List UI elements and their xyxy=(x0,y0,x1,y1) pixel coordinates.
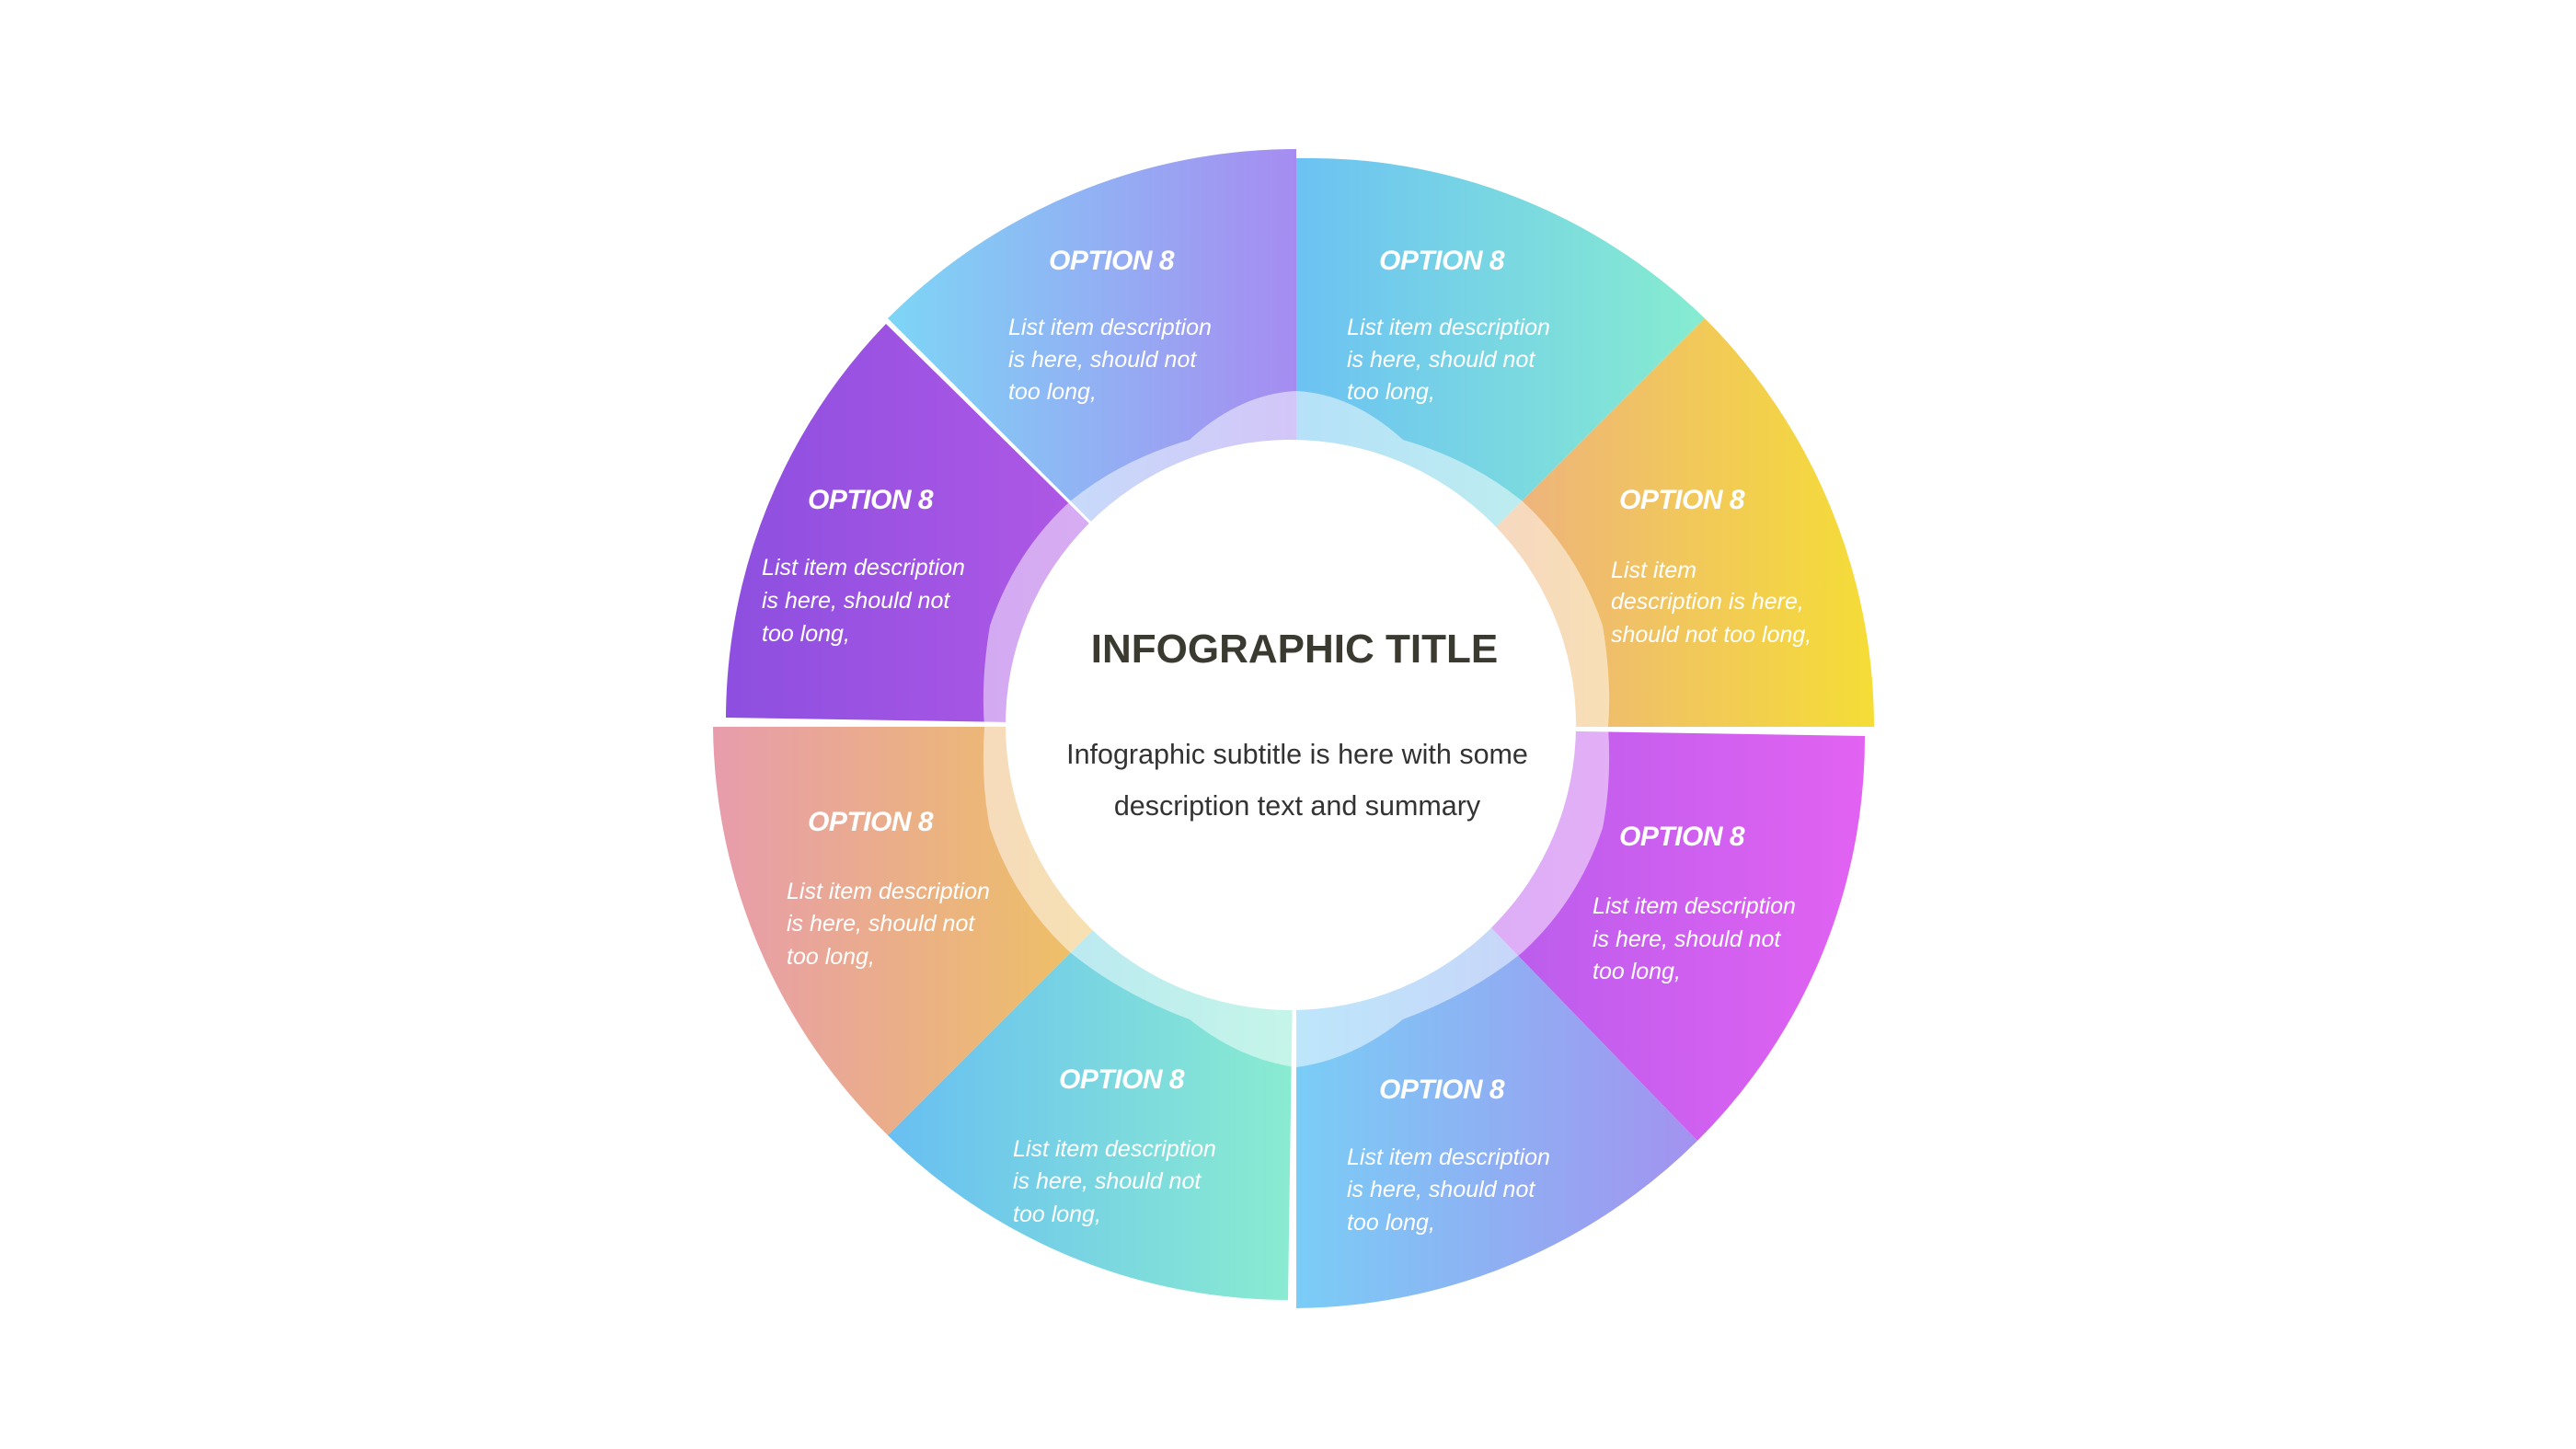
option: top-right: OPTION 8 xyxy=(1379,246,1505,276)
option: right-upper: List item xyxy=(1611,558,1696,583)
option: top-right: List item description xyxy=(1347,315,1550,340)
center title: INFOGRAPHIC TITLE xyxy=(1091,627,1498,672)
option: right-lower: List item description xyxy=(1593,893,1796,919)
option: bottom-left: is here, should not xyxy=(1013,1168,1202,1194)
option: left-upper: OPTION 8 xyxy=(808,485,934,515)
option: bottom-right xyxy=(1347,1075,1550,1236)
option: top-left xyxy=(1008,246,1212,405)
option: left-lower: too long, xyxy=(787,944,875,970)
option: right-upper: OPTION 8 xyxy=(1619,485,1745,515)
option: bottom-right: OPTION 8 xyxy=(1379,1075,1505,1105)
option: top-left: too long, xyxy=(1008,379,1097,405)
option: top-right: is here, should not xyxy=(1347,347,1535,373)
option: right-upper: description is here, xyxy=(1611,589,1804,615)
option: left-lower: is here, should not xyxy=(787,911,975,937)
wavy light ring xyxy=(983,391,1609,1067)
option: bottom-left xyxy=(1013,1064,1216,1227)
option: left-lower: OPTION 8 xyxy=(808,807,934,837)
option: right-lower: too long, xyxy=(1593,959,1681,984)
option: right-lower: is here, should not xyxy=(1593,926,1781,952)
option: left-lower: List item description xyxy=(787,879,990,904)
option: left-lower xyxy=(787,807,990,970)
option: bottom-left: List item description xyxy=(1013,1136,1216,1162)
option: right-lower: OPTION 8 xyxy=(1619,822,1745,852)
center white circle xyxy=(1006,440,1576,1010)
option: right-upper: should not too long, xyxy=(1611,622,1811,648)
option: top-right xyxy=(1347,246,1550,405)
center subtitle: Infographic subtitle is here with some xyxy=(1066,739,1528,770)
option: bottom-left: too long, xyxy=(1013,1202,1101,1227)
option: left-upper: List item description xyxy=(762,555,965,581)
option: right-lower xyxy=(1593,822,1796,984)
option: right-upper xyxy=(1611,485,1811,648)
option: top-left: List item description xyxy=(1008,315,1212,340)
option: bottom-left: OPTION 8 xyxy=(1059,1064,1185,1095)
option: left-upper: is here, should not xyxy=(762,588,950,614)
option: top-left: OPTION 8 xyxy=(1049,246,1175,276)
option: bottom-right: is here, should not xyxy=(1347,1177,1535,1202)
option: left-upper xyxy=(762,485,965,647)
center subtitle: description text and summary xyxy=(1114,790,1481,822)
option: top-left: is here, should not xyxy=(1008,347,1197,373)
option: bottom-right: List item description xyxy=(1347,1144,1550,1170)
wheel segments xyxy=(713,149,1874,1308)
option: bottom-right: too long, xyxy=(1347,1210,1435,1236)
option: left-upper: too long, xyxy=(762,621,850,647)
option: top-right: too long, xyxy=(1347,379,1435,405)
center subtitle xyxy=(1066,739,1528,822)
